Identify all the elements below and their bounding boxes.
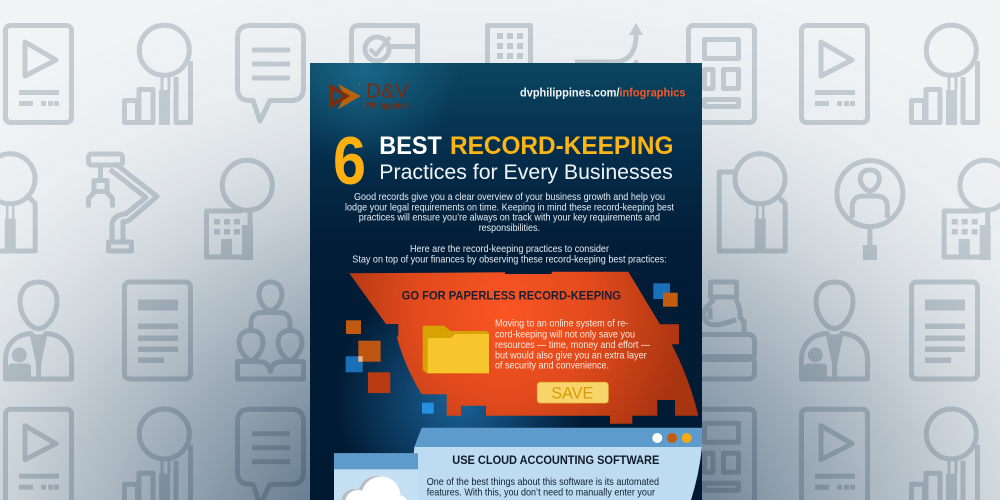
panel: infographic poster <box>310 63 702 500</box>
icon: robot arm <box>88 154 157 251</box>
icon: magnifier with chart <box>124 25 190 125</box>
intro paragraph: responsibilities. <box>479 223 540 234</box>
icon: speech bubble <box>238 409 304 500</box>
intro paragraph: practices will ensure you’re always on track with your key requirements and <box>359 213 660 224</box>
small cloud window <box>334 453 418 500</box>
website url: dvphilippines.com/ <box>520 86 620 100</box>
icon: businessman <box>6 282 72 382</box>
icon: text document <box>912 282 978 379</box>
icon: magnifier with chart <box>912 409 978 500</box>
title: Practices for Every Businesses <box>379 160 673 184</box>
icon: hand and stack <box>666 282 754 379</box>
icon: text document <box>124 282 190 379</box>
body text: features. With this, you don’t need to manually enter your <box>427 488 655 499</box>
icon: video document <box>802 26 868 122</box>
icon: page layout <box>688 409 754 500</box>
title <box>333 123 674 199</box>
icon: magnifier document <box>719 154 785 252</box>
icon: video document <box>6 409 72 500</box>
logo <box>329 81 410 110</box>
big number six: 6 <box>333 123 366 199</box>
icon: magnifier with chart <box>912 25 978 125</box>
panel: paperless record-keeping <box>349 272 698 424</box>
intro paragraph <box>345 192 674 265</box>
icon: page layout <box>688 26 754 122</box>
body text: cord-keeping will not only save you <box>495 329 635 340</box>
heading: GO FOR PAPERLESS RECORD-KEEPING <box>402 291 621 303</box>
decorative squares right <box>653 283 678 307</box>
icon: office building <box>488 26 530 86</box>
intro paragraph: Good records give you a clear overview of your business growth and help you <box>354 192 665 203</box>
icon: cloud <box>341 476 409 500</box>
title: BEST <box>379 132 442 160</box>
body text: but would also give you an extra layer <box>495 350 647 361</box>
decorative squares left <box>346 320 434 414</box>
icon: checklist document <box>352 26 419 68</box>
icon: magnifier document <box>0 154 35 252</box>
heading: USE CLOUD ACCOUNTING SOFTWARE <box>452 453 659 467</box>
save button: SAVE <box>551 384 593 402</box>
icon: folder <box>423 326 489 373</box>
icon: video document <box>6 26 72 122</box>
intro paragraph: lodge your legal requirements on time. Keeping in mind these record-keeping best <box>345 202 674 213</box>
icon: magnifier building <box>206 160 272 260</box>
body text: of security and convenience. <box>495 361 609 372</box>
intro paragraph: Stay on top of your finances by observing these record-keeping best practices: <box>352 254 667 265</box>
body text <box>427 477 659 499</box>
icon: businessman <box>802 282 868 382</box>
icon: team <box>238 282 304 379</box>
icon: speech bubble <box>238 26 304 121</box>
window control dots <box>652 433 692 443</box>
intro paragraph: Here are the record-keeping practices to consider <box>410 244 609 255</box>
website url <box>520 86 686 100</box>
icon: magnifier building <box>944 160 1000 260</box>
body text: resources — time, money and effort — <box>495 340 651 351</box>
icon: person search <box>837 161 903 260</box>
save button <box>537 382 608 403</box>
website url: infographics <box>620 86 686 100</box>
body text <box>495 319 651 372</box>
icon: video document <box>802 409 868 500</box>
icon: magnifier with chart <box>124 409 190 500</box>
title: RECORD-KEEPING <box>450 132 674 160</box>
logo: Philippines <box>366 100 409 110</box>
panel: cloud accounting window <box>334 428 702 500</box>
icon: growth arrow <box>575 23 643 64</box>
body text: One of the best things about this software is its automated <box>427 477 659 488</box>
logo: D&V <box>366 81 410 103</box>
body text: Moving to an online system of re- <box>495 319 628 330</box>
